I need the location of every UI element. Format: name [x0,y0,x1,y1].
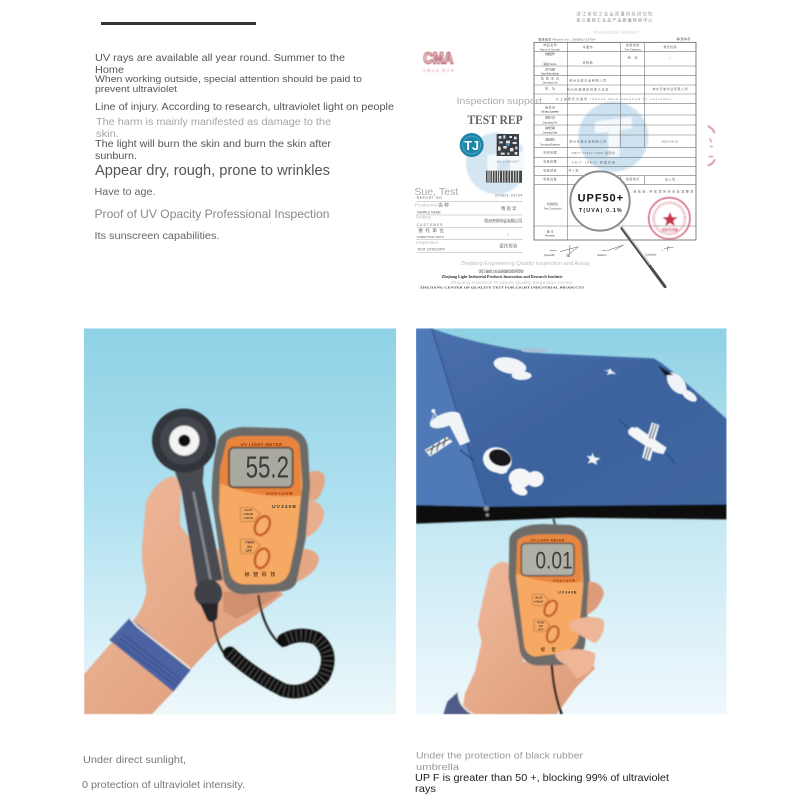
organisation footer: Zhejiang Industrial Products Quality Inspection Center [450,280,573,286]
cover form: 委托单位 [418,227,446,234]
report table text: 伞面布 [583,44,593,49]
magnifier callout: UPF50+: UPF50+ [578,193,623,205]
buttons [253,514,272,570]
umbrella canopy [416,328,727,507]
report table text: 等级 Grade [543,61,557,66]
sky background [84,328,396,714]
report table text: 共 1 项 [568,168,578,173]
TJ badge: TJ [464,139,479,153]
meter labels: mW/µW [534,600,544,603]
meter orange face [219,436,302,584]
meter labels: dbcd/f [535,596,543,599]
meter labels: ON [539,624,543,628]
caption: under umbrella: Under the protection of black rubber [416,750,583,762]
hand holding meter [462,562,595,714]
text block: UV introduction: Its sunscreen capabilities. [94,230,220,242]
report table text: Name of Sample [540,47,560,51]
report table text: 检验单位 [541,75,559,80]
icon: astronaut [482,446,544,496]
TJ badge [460,133,484,157]
text block: UV introduction: The light will burn the skin and burn the skin after [95,138,332,150]
CMA logo: 计量认证 浙江省 [423,67,454,72]
panel: inspection report document: TEST REP [467,113,523,127]
meter labels: UV LIGHT METER [241,442,283,447]
report table text: 委托检验 [663,44,677,49]
caption: under umbrella: UP F is greater than 50 +, blocking 99% of ultraviolet [415,772,669,784]
finger: index [308,471,325,501]
report table text: 杭州天堂伞业有限公司 [652,86,688,91]
panel: inspection report document: No. 11000-0017 [497,160,519,164]
cover form: 委托检验 [499,243,518,250]
magnifier callout: UPF50+: T(UVA) 0.1% [579,208,622,214]
report table text: Date of Manufacture [541,72,559,76]
button labels [533,594,550,632]
icon: space station [618,420,675,463]
icon: spaceship corner [666,372,698,403]
caption: under umbrella: umbrella [416,762,460,773]
signature labels: 批准 [566,254,571,258]
meter labels: 标智 [541,646,556,653]
organisation footer: Zhejiang Engineering Quality Inspection and Assay [461,261,590,267]
report table text: 杭州天堂伞业有限公司 [569,77,606,82]
QR code [497,134,519,156]
report table text: 检验结论 [547,201,558,206]
report table text: Test Category [624,47,641,51]
fingers [587,582,604,615]
report table text: Sampling Per [542,120,557,124]
meter labels: mW/µW [244,516,254,520]
red stamp: 检验专用章 [662,227,679,232]
cover form: Production [415,203,439,209]
report table text: 检验依据 [543,159,557,164]
meter labels: 标智科技 [245,571,275,578]
report table text: Test Conclusion [543,206,562,210]
report table text: Sampling Unit [542,80,558,84]
meter labels: UVA+UVB [266,491,293,497]
meter labels: PEAK [537,621,544,625]
text block: UV introduction: UV rays are available all year round. Summer to the [95,52,345,64]
cover form: 杭州天堂伞业有限公司 [484,218,522,225]
report table text: GB/T 18830 防紫外线 [572,159,615,164]
report table text: 判定依据 [543,149,557,154]
document header [576,10,653,36]
report table text: 抽样日期 [545,125,555,130]
document header: Inspection Report [593,30,639,36]
report table text: Sampling Business [540,142,560,146]
cover form: Testing [415,215,431,221]
report table text: 样品名称 [543,42,557,47]
cover form: REPORT NO. [417,196,444,200]
report table text: 生产日期 [545,67,555,72]
caption: direct sunlight [82,754,245,791]
icon: planet top [492,354,532,380]
cover form: 晴雨伞 [501,205,517,212]
red stamp [649,198,690,239]
report table text: 商标 [628,54,638,59]
umbrella black trim [416,504,727,524]
report table text: 规格型号 [545,51,555,56]
signature labels: Compiled by [645,253,657,257]
meter cord [552,663,562,714]
meter labels: UV340B [558,590,577,595]
report table text [540,42,693,238]
test report cover text: Inspection support [457,96,543,106]
report table text: 检验项目 [543,168,557,173]
LCD screen [229,448,293,487]
sky background [416,328,727,714]
signatures [550,245,673,254]
meter labels: PEAK [246,541,255,545]
document header: 浙江省轻工业品质量检验研究院 [576,10,653,17]
meter labels: mW/µW [244,512,254,516]
CMA logo: CMA [423,50,453,67]
meter orange face [516,534,583,657]
sensor probe [173,465,223,584]
report table text: 检验地点 [626,176,639,181]
meter labels: OFF [538,627,544,631]
report table text: 合格品 [583,59,593,64]
organisation footer: （浙江省轻工业品质量检验研究院） [476,269,526,274]
cover form: 名 称 [438,202,449,209]
report table text: 杭州市西湖区转塘工业区 [567,87,609,92]
text block: UV introduction: sunburn. [95,150,137,162]
report table text: 检验设备 [543,176,557,181]
wrist cuff [443,692,473,714]
text block: UV introduction: skin. [96,128,119,140]
cover form: Inspection [416,240,439,246]
meter cord [258,595,283,647]
cover form: SUBMITTED UNITS [417,235,444,239]
barcode [486,171,522,183]
text block: UV introduction: Proof of UV Opacity Professional Inspection [94,207,330,221]
cover form: SAMPLE NAME [417,210,441,214]
meter labels [530,539,577,653]
document header: 浙江省轻工业品产品质量检验中心 [576,17,652,23]
meter labels: ON [247,545,252,549]
organisation footer: ZHEJIANG CENTER OF QUALITY TEST FOR LIGHT INDUSTRIAL PRODUCTS [420,286,584,290]
text block: UV introduction [94,52,394,242]
icon: stars [587,368,617,465]
UV meter body [212,427,310,594]
panel: direct sunlight meter photo [84,328,396,714]
text block: UV introduction: When working outside, special attention should be paid to [95,74,362,84]
watermark logos [466,102,648,194]
meter labels [241,442,296,578]
LCD screen [521,543,574,576]
meter labels: dbcd/f [244,508,252,512]
report table text: 杭州天堂伞业有限公司 [569,139,606,144]
report table text: 检验类别 [626,42,639,47]
report table text: 本公司 [665,177,675,182]
text block: UV introduction: Home [95,64,124,76]
cover form: / [507,232,509,236]
button labels [241,508,260,553]
report table text: 以上由委托方提供 (Above were supplied by customer) [556,96,672,101]
text block: UV introduction: Line of injury. According to research, ultraviolet light on people [95,101,394,113]
cover form: Sue, Test [414,187,459,198]
meter reading: 0.01 [535,547,573,574]
report table text: GB/T 17927-2009 遮阳伞 [572,150,615,155]
report table text: 经检验,所检项目符合标准要求 [633,189,693,194]
meter labels: UVA+UVB [553,578,575,583]
finger: ring [294,549,319,582]
report table [534,42,696,240]
signature labels [544,253,657,258]
caption: direct sunlight: Under direct sunlight, [83,754,186,766]
hand holding meter [84,476,283,714]
report table text: 备注 [547,229,553,234]
coiled cable [230,635,328,692]
report number line: 报告编号 Report No.: 200801-03704 [538,36,595,41]
meter reading: 55.2 [246,451,289,485]
report table text: / [670,56,671,60]
text block: UV introduction: prevent ultraviolet [95,84,178,94]
text block: UV introduction: Appear dry, rough, prone to wrinkles [95,163,330,179]
cover form: 200801-03704 [495,194,522,198]
report table text: 地址 [545,85,555,90]
top accent bar [101,22,256,25]
report table text: Remarks [545,234,555,238]
caption: direct sunlight: 0 protection of ultraviolet intensity. [82,779,245,791]
report table text: 抽样单 [545,104,555,109]
text block: UV introduction: The harm is mainly manifested as damage to the [96,116,331,128]
report table text: 2020-06-01 [662,140,679,144]
cover form [414,187,523,252]
organisation footer: Zhejiang Light Industrial Products Innovation and Research Institute [441,275,563,279]
report table text: 抽样人员 [545,114,555,119]
palm shadow [223,592,280,618]
icon: satellite dish [425,408,473,460]
caption: under umbrella [415,750,669,795]
panel: inspection report document [414,10,715,290]
right cut-off stamp [708,126,715,166]
CMA logo [423,50,454,72]
meter labels: UV340B [272,504,296,510]
text block: UV introduction: Have to age. [94,186,156,198]
cover form: TEST CATEGORY [417,248,446,252]
panel: inspection report document: 第 1 页 共 1 页 [676,36,690,41]
finger: middle [304,501,324,538]
organisation footer [420,261,590,290]
buttons [542,598,561,644]
UV meter body [509,524,590,666]
meter labels: OFF [246,549,252,553]
signature labels: Approved by [544,253,556,257]
meter labels: UV LIGHT METER [530,539,565,543]
signature labels: Verified by [597,253,608,257]
report table text: 送检单位 [545,137,555,142]
wrist band [109,618,191,692]
caption: under umbrella: rays [415,783,436,795]
magnifier callout: UPF50+ [570,171,665,287]
report table text: Sampling Organization [541,110,559,114]
cover form: CUSTOMER [417,223,444,227]
report table text: Sampling Date [542,130,558,134]
panel: under umbrella meter photo [416,328,727,714]
